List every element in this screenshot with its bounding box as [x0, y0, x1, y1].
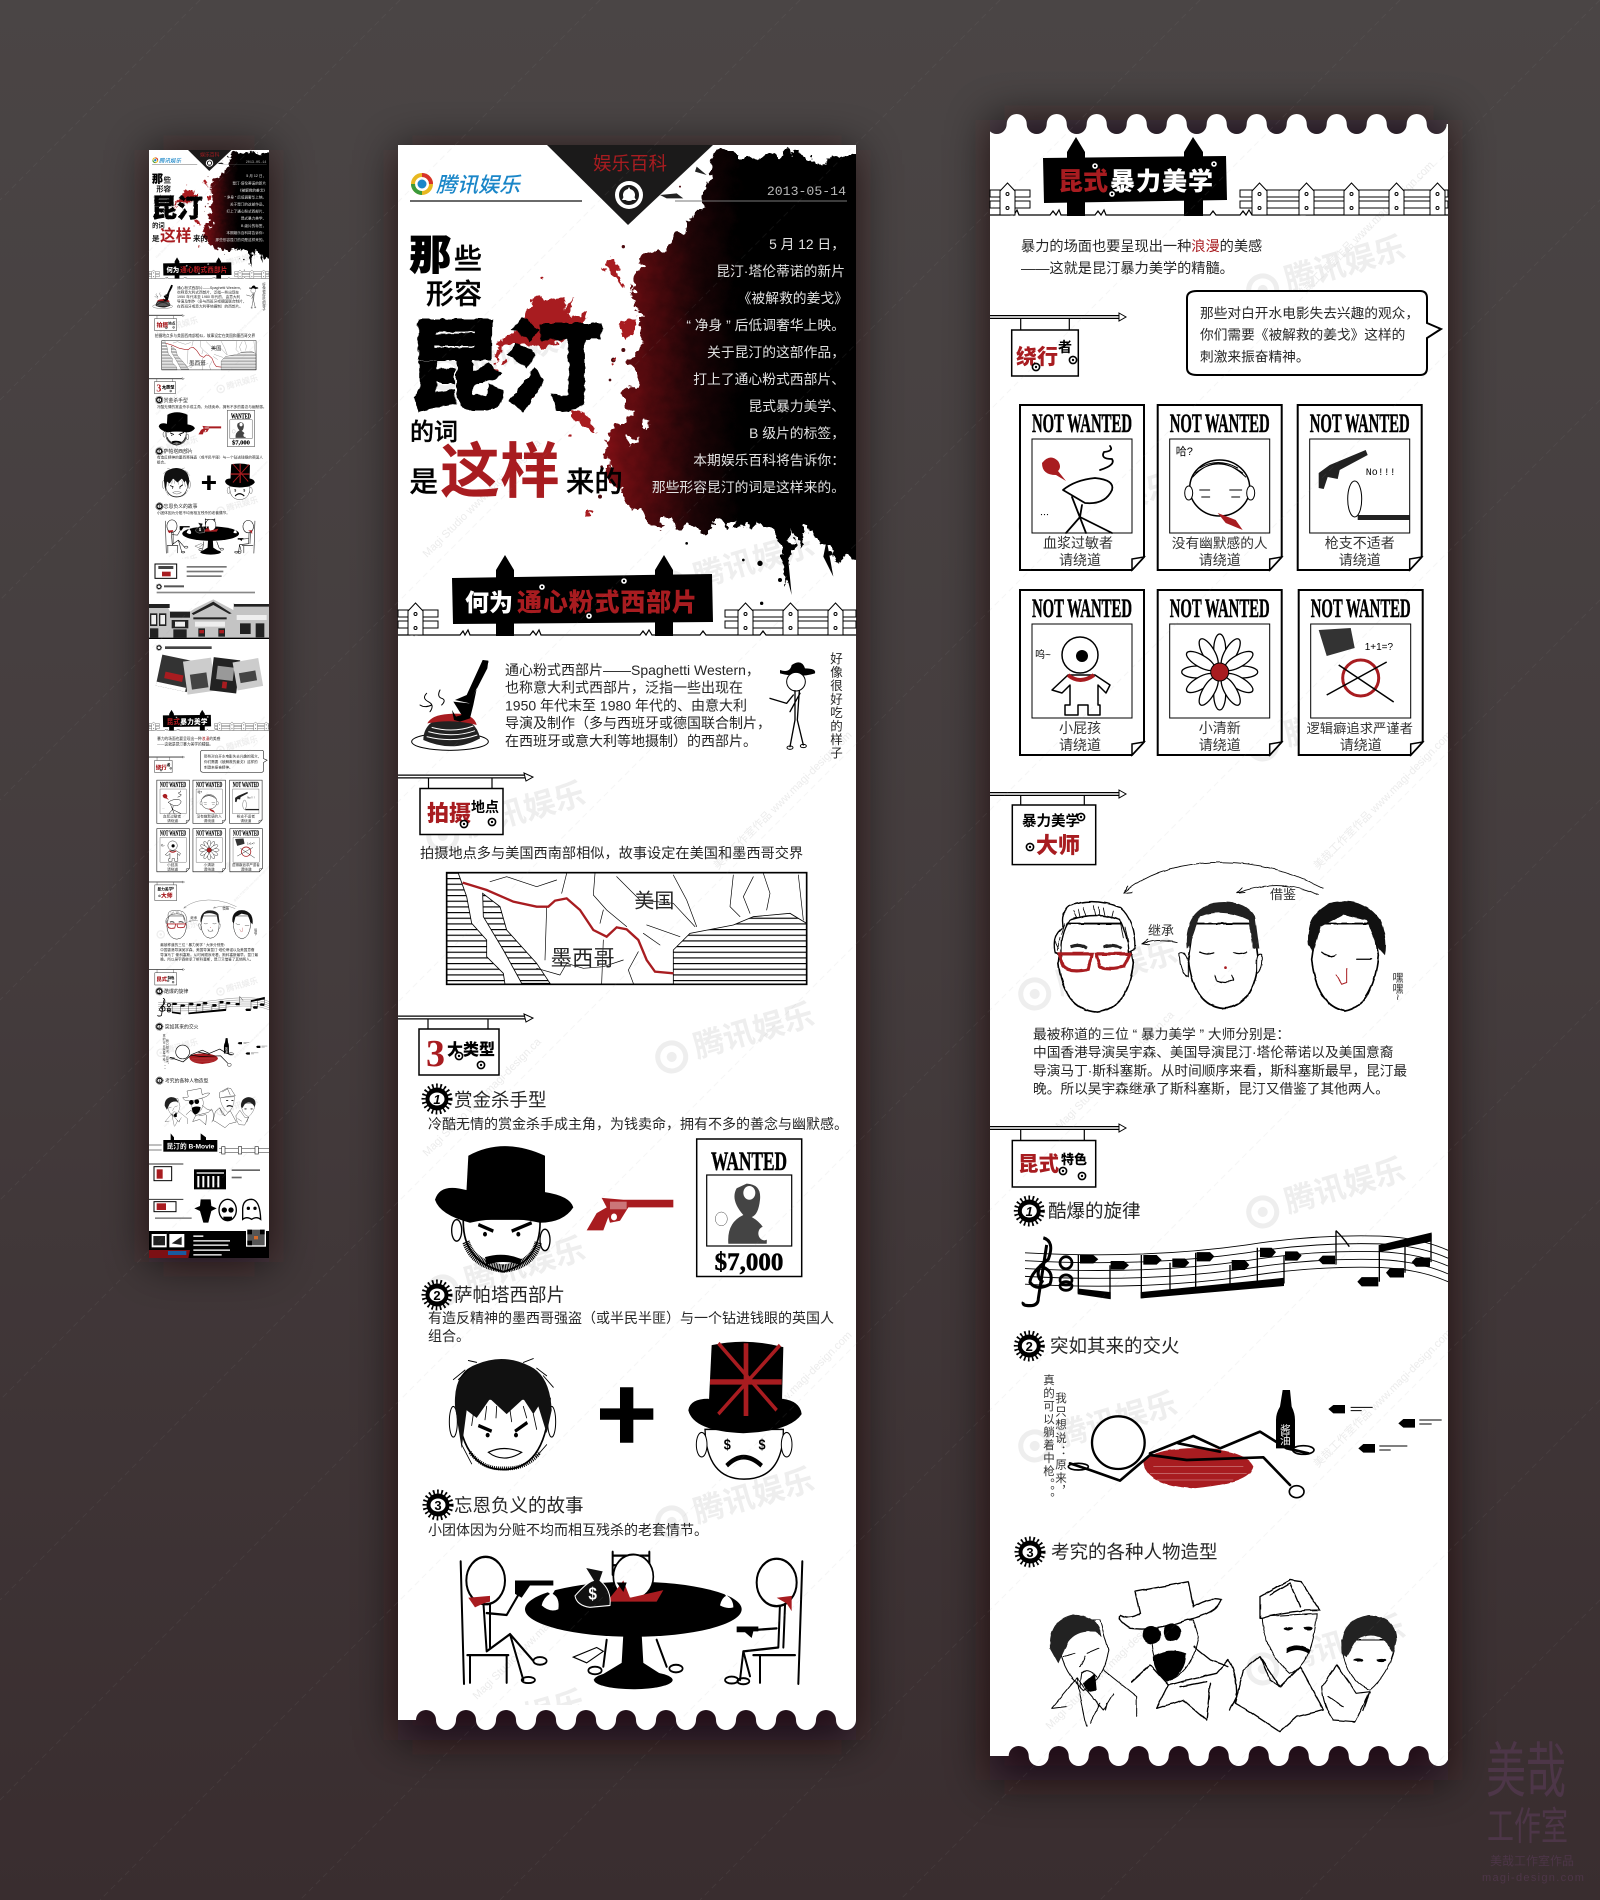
- text watermarks: 腾讯娱乐: [1052, 934, 1181, 1002]
- map: 美国: [634, 890, 674, 913]
- vertical notes: 真的可以躺着中枪。。。: [1042, 1373, 1055, 1506]
- masters text: 导演马丁·斯科塞斯。从时间顺序来看，斯科塞斯最早，昆汀最: [1033, 1062, 1407, 1078]
- dead stick figure with bullets: 油: [1280, 1434, 1291, 1447]
- intro text: 暴力的场面也要呈现出一种浪漫的美感: [1021, 238, 1262, 255]
- cowboy head: [435, 1146, 573, 1272]
- text watermarks: 腾讯娱乐: [1280, 230, 1409, 298]
- heading banner: spaghetti western: [398, 555, 856, 636]
- small notes: borrowing, inherits, laughter: 借鉴: [1270, 887, 1296, 902]
- hero intro text: 昆式暴力美学、: [748, 399, 845, 414]
- heading banner: violence aesthetics: 昆式: [1058, 168, 1108, 196]
- speech bubble: 你们需要《被解救的姜戈》这样的: [1200, 326, 1405, 342]
- sign: masters: 暴力美学: [1022, 812, 1080, 830]
- poster: logic obsessives: 请绕道: [1340, 737, 1382, 753]
- hero intro text: 本期娱乐百科将告诉你：: [693, 453, 845, 468]
- icon: spaghetti: [412, 660, 489, 750]
- intro text: 在西班牙或意大利等地摄制）的西部片。: [505, 733, 757, 749]
- sign: three types: [398, 1014, 533, 1075]
- studio watermark: 工作室: [1487, 1805, 1568, 1849]
- poster: no humor: NOT WANTED: [1170, 409, 1270, 438]
- feature 3 heading: 考究的各种人物造型: [1051, 1542, 1218, 1562]
- header badge: [547, 145, 713, 225]
- map: [447, 873, 807, 984]
- arrows: [1123, 862, 1323, 945]
- vertical comment: 好像很好吃的样子: [828, 652, 842, 760]
- item 1: bounty hunter heading: 1: [433, 1092, 441, 1107]
- text watermarks: 腾讯娱乐: [1280, 685, 1409, 753]
- item 2: zapata western heading: 2: [433, 1288, 441, 1303]
- heading banner: violence aesthetics: 暴力美学: [1110, 167, 1213, 196]
- text watermarks: 腾讯娱乐: [1052, 466, 1181, 534]
- hero intro text: 那些形容昆汀的词是这样来的。: [652, 479, 845, 495]
- poster: brats: 请绕道: [1059, 737, 1101, 753]
- feature 3 heading: 3: [1026, 1545, 1034, 1560]
- sign: avoid: [990, 313, 1126, 376]
- intro text: ——这就是昆汀暴力美学的精髓。: [1021, 260, 1234, 277]
- studio watermark: 美哉工作室作品: [1490, 1853, 1574, 1868]
- django: [1119, 1582, 1237, 1720]
- title: 些: [454, 243, 482, 274]
- hero intro text: B 级片的标签，: [749, 425, 845, 441]
- sign: avoid: 绕行: [1016, 346, 1058, 369]
- heading banner: spaghetti western: 通心粉式西部片: [517, 588, 697, 617]
- intro text: 也称意大利式西部片，泛指一些出现在: [505, 680, 743, 696]
- sign: features: 特色: [1061, 1152, 1087, 1167]
- text watermarks: 腾讯娱乐: [1052, 1386, 1181, 1454]
- poster: logic obsessives: 1+1=?: [1365, 642, 1394, 653]
- poster: gun intolerant: NOT WANTED: [1310, 409, 1410, 438]
- british man with union jack hat: [688, 1342, 802, 1479]
- sign: three types: 大类型: [447, 1040, 495, 1059]
- title: [406, 231, 623, 506]
- item 3 description: 小团体因为分赃不均而相互残杀的老套情节。: [428, 1522, 708, 1538]
- diagonal studio captions: Magi Studio www.magi-design.ca: [1044, 1608, 1167, 1732]
- dead stick figure with bullets: 酱: [1280, 1423, 1291, 1436]
- sign: masters: [990, 790, 1126, 865]
- poster: logic obsessives: NOT WANTED: [1311, 594, 1411, 623]
- cowboy stick figure: [770, 662, 815, 749]
- poster: logic obsessives: [1299, 590, 1423, 755]
- speech bubble: 那些对白开水电影失去兴趣的观众，: [1200, 306, 1419, 321]
- poster: no humor: 没有幽默感的人: [1172, 535, 1268, 551]
- sign: location: [398, 773, 533, 834]
- poster: blood allergic: 请绕道: [1059, 552, 1101, 568]
- poster: indie youths: NOT WANTED: [1170, 594, 1270, 623]
- diagonal studio captions: Magi Studio www.magi-design.ca: [471, 1578, 594, 1702]
- intro text: 通心粉式西部片——Spaghetti Western，: [505, 662, 760, 678]
- speech bubble: 刺激来振奋精神。: [1200, 350, 1310, 364]
- sign: avoid: 者: [1058, 339, 1072, 355]
- title: 昆汀: [406, 313, 603, 423]
- tarantino: [1308, 901, 1386, 1011]
- sign: three types: 3: [426, 1033, 445, 1075]
- calvin candie: [1050, 1615, 1137, 1727]
- feature 1 heading: 1: [1026, 1204, 1033, 1219]
- sign: features: 昆式: [1018, 1152, 1060, 1176]
- thumbnail: bottom section with footer: 昆汀的 B-Movie: [167, 1142, 215, 1151]
- poster: brats: 小屁孩: [1059, 720, 1101, 736]
- hero intro text: 打上了通心粉式西部片、: [693, 371, 845, 387]
- hero intro text: 《被解救的姜戈》: [738, 291, 848, 306]
- sign: location: 拍摄: [427, 801, 471, 826]
- poster: gun intolerant: No!!!: [1366, 468, 1396, 479]
- panel shadows: [149, 120, 1448, 1780]
- hero intro text: 昆汀·塔伦蒂诺的新片: [716, 264, 845, 279]
- studio watermark: magi-design.com: [1482, 1872, 1585, 1884]
- title: 这样: [440, 439, 560, 506]
- text watermarks: 腾讯娱乐: [689, 997, 818, 1065]
- text watermarks: 腾讯娱乐: [460, 1231, 589, 1299]
- item 1 description: 冷酷无情的赏金杀手成主角，为钱卖命，拥有不多的善念与幽默感。: [428, 1116, 848, 1132]
- wanted poster: WANTED: [711, 1147, 787, 1176]
- poster: logic obsessives: 逻辑癖追求严谨者: [1307, 721, 1413, 736]
- poster: blood allergic: ⋯: [1040, 510, 1049, 520]
- vertical notes: 我只想说：原来，: [1054, 1392, 1067, 1498]
- feature 1 heading: 酷爆的旋律: [1048, 1200, 1141, 1222]
- british man with union jack hat: $: [758, 1436, 766, 1452]
- diagonal studio captions: 美哉工作室作品 www.magi-design.com: [710, 1328, 855, 1472]
- poster: gun intolerant: 枪支不适者: [1325, 535, 1395, 551]
- diagonal studio captions: Magi Studio www.magi-design.ca: [1054, 1008, 1177, 1132]
- mexican bandit plus british man: [449, 1342, 802, 1479]
- intro text: 1950 年代末至 1980 年代的、由意大利: [505, 698, 747, 714]
- heading banner: violence aesthetics: [990, 137, 1448, 216]
- feature 2 heading: [1016, 1333, 1180, 1359]
- table shootout: [461, 1552, 802, 1689]
- dead stick figure with bullets: [1068, 1390, 1442, 1498]
- poster: no humor: [1158, 405, 1282, 570]
- item 2: zapata western heading: 萨帕塔西部片: [454, 1284, 565, 1306]
- feature 3 heading: [1017, 1539, 1218, 1565]
- hero intro text: [652, 237, 848, 495]
- poster: gun intolerant: 请绕道: [1339, 552, 1381, 568]
- text watermarks: 腾讯娱乐: [462, 314, 591, 382]
- tencent entertainment logo: 腾讯娱乐: [436, 174, 522, 197]
- title: 是: [409, 467, 438, 499]
- item 3: betrayal heading: 3: [434, 1498, 442, 1513]
- poster: blood allergic: [1020, 405, 1144, 570]
- poster: no humor: 请绕道: [1199, 552, 1241, 568]
- bounty hunter artwork: [435, 1146, 673, 1272]
- ink splatter: [598, 150, 890, 605]
- poster: gun intolerant: [1298, 405, 1422, 570]
- masters text: 中国香港导演吴宇森、美国导演昆汀·塔伦蒂诺以及美国意裔: [1033, 1044, 1394, 1060]
- text watermarks: 腾讯娱乐: [460, 776, 589, 844]
- studio watermark: [1482, 1738, 1585, 1884]
- map: 墨西哥: [551, 947, 615, 971]
- diagonal studio captions: Magi Studio www.magi-design.ca: [1019, 448, 1142, 572]
- text watermarks: 腾讯娱乐: [689, 1462, 818, 1530]
- heading banner: spaghetti western: 何为: [465, 590, 513, 617]
- plus sign: [600, 1387, 653, 1443]
- small notes: borrowing, inherits, laughter: 嘿嘿~: [1391, 972, 1404, 1000]
- diagonal studio captions: 美哉工作室作品 www.magi-design.com: [1310, 1326, 1455, 1470]
- text watermarks: 腾讯娱乐: [1280, 1609, 1409, 1677]
- aldo: [1235, 1580, 1323, 1732]
- small notes: borrowing, inherits, laughter: 继承: [1148, 923, 1174, 938]
- thumbnail: middle section with town and posters: [149, 564, 269, 695]
- poster: indie youths: [1158, 590, 1282, 755]
- hero artwork: [406, 150, 890, 605]
- table shootout: $: [588, 1585, 597, 1604]
- text watermarks: 腾讯娱乐: [460, 1684, 589, 1752]
- poster: blood allergic: 血浆过敏者: [1043, 535, 1113, 551]
- item 2 description: [428, 1310, 834, 1344]
- header badge: 娱乐百科: [593, 153, 667, 174]
- thumbnail: top part of article: [149, 150, 278, 571]
- logo mark: [615, 181, 643, 209]
- poster: blood allergic: NOT WANTED: [1032, 409, 1132, 438]
- date: 2013-05-14: [767, 184, 846, 199]
- hero intro text: 5 月 12 日，: [769, 237, 845, 252]
- woo: [1179, 902, 1262, 1009]
- item 1: bounty hunter heading: [424, 1086, 547, 1112]
- landa: [1322, 1615, 1397, 1722]
- diagonal studio captions: Magi Studio www.magi-design.ca: [421, 1035, 544, 1159]
- text watermarks: 腾讯娱乐: [689, 527, 818, 595]
- masters text: 晚。所以吴宇森继承了斯科塞斯，昆汀又借鉴了其他两人。: [1033, 1080, 1389, 1096]
- poster: brats: NOT WANTED: [1032, 594, 1132, 623]
- sign: location: 地点: [471, 799, 499, 815]
- item 3: betrayal heading: [425, 1492, 584, 1518]
- title: 的词: [410, 419, 458, 446]
- hero intro text: 关于昆汀的这部作品，: [707, 344, 845, 360]
- panel: article part one: [398, 145, 890, 1752]
- diagonal studio captions: 美哉工作室作品 www.magi-design.com: [710, 728, 855, 872]
- wanted poster: [697, 1139, 802, 1276]
- masters text: [1033, 1027, 1407, 1096]
- poster: no humor: 哈?: [1176, 445, 1193, 458]
- item 3: betrayal heading: 忘恩负义的故事: [454, 1495, 584, 1516]
- sign: masters: 大师: [1036, 833, 1080, 858]
- feature 1 heading: [1016, 1198, 1141, 1224]
- panel: article part two: [980, 114, 1460, 1766]
- diagonal studio captions: [1019, 158, 1455, 1732]
- diagonal studio captions: [421, 436, 855, 1702]
- text watermarks: [1016, 230, 1409, 1687]
- poster: brats: [1020, 590, 1144, 755]
- tencent entertainment logo: [410, 174, 582, 201]
- item 2: zapata western heading: [424, 1282, 565, 1308]
- thumbnail: aesthetic part of article: [149, 710, 271, 1128]
- intro section artwork: [412, 660, 815, 750]
- item 1: bounty hunter heading: 赏金杀手型: [454, 1090, 547, 1110]
- text watermarks: 腾讯娱乐: [1280, 1152, 1409, 1220]
- hero intro text: “ 净身 ” 后低调奢华上映。: [686, 318, 845, 333]
- feature 2 heading: 突如其来的交火: [1050, 1336, 1180, 1356]
- bandit: [449, 1359, 556, 1470]
- sign: features: [990, 1124, 1126, 1187]
- panel: thumbnail overview: [149, 150, 278, 1258]
- four character portraits: [1050, 1580, 1397, 1732]
- masters text: 最被称道的三位 “ 暴力美学 ” 大师分别是：: [1033, 1027, 1290, 1042]
- location text: 拍摄地点多与美国西南部相似，故事设定在美国和墨西哥交界: [420, 845, 803, 862]
- poster: brats: 呜~: [1035, 648, 1051, 661]
- text watermarks: [424, 314, 818, 1752]
- item 2 description: 有造反精神的墨西哥强盗（或半民半匪）与一个钻进钱眼的英国人: [428, 1310, 834, 1326]
- scorsese: [1054, 902, 1135, 1012]
- feature 2 heading: 2: [1026, 1339, 1033, 1354]
- red revolver: [587, 1198, 673, 1230]
- item 2 description: 组合。: [428, 1328, 470, 1344]
- british man with union jack hat: $: [724, 1436, 731, 1452]
- poster: indie youths: 小清新: [1199, 720, 1241, 736]
- three directors: [1054, 862, 1386, 1012]
- diagonal studio captions: Magi Studio www.magi-design.ca: [421, 436, 544, 560]
- thumbnail: bottom section with footer: [149, 1133, 269, 1258]
- wanted poster: $7,000: [715, 1249, 783, 1276]
- poster: indie youths: 请绕道: [1199, 737, 1241, 753]
- intro text: [1021, 238, 1262, 277]
- intro text: 导演及制作（多与西班牙或德国联合制片，: [505, 715, 771, 731]
- vertical notes: [1042, 1373, 1067, 1506]
- diagonal studio captions: 美哉工作室作品 www.magi-design.com: [1292, 158, 1437, 302]
- small notes: borrowing, inherits, laughter: [1148, 887, 1404, 1000]
- title: 来的: [566, 467, 623, 499]
- title: 形容: [426, 278, 482, 309]
- music staff: [1023, 1231, 1448, 1306]
- red blood splash: [492, 257, 637, 517]
- diagonal studio captions: 美哉工作室作品 www.magi-design.com: [1310, 728, 1455, 872]
- intro text: [505, 662, 771, 749]
- studio watermark: 美哉: [1486, 1738, 1566, 1805]
- title: 那: [409, 231, 451, 278]
- speech bubble: [1187, 291, 1441, 375]
